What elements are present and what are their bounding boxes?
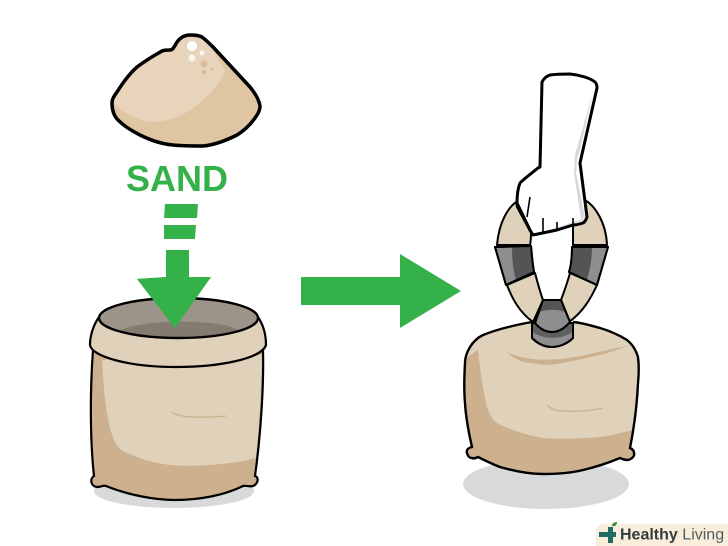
icon: open sand bag — [90, 270, 266, 508]
icon: full tied bag — [463, 74, 639, 509]
icon: medical cross with leaf — [599, 522, 617, 543]
icon: sand pile — [112, 35, 260, 146]
logo text: Healthy Living — [620, 526, 724, 544]
bag collar — [90, 317, 266, 367]
bag body — [464, 322, 639, 474]
logo: Healthy Living badge — [596, 522, 728, 546]
arrow: horizontal transition arrow — [301, 254, 461, 328]
bag shadow — [94, 474, 254, 508]
bag opening — [99, 298, 258, 338]
bag shadow — [463, 459, 629, 509]
arrow: dashes above bag — [137, 204, 211, 328]
heading: SAND label: SAND — [126, 158, 228, 199]
bag body — [91, 350, 263, 500]
icon: gripping hand — [517, 74, 597, 235]
arrow head overlap — [137, 270, 211, 328]
bag handle — [495, 200, 608, 347]
